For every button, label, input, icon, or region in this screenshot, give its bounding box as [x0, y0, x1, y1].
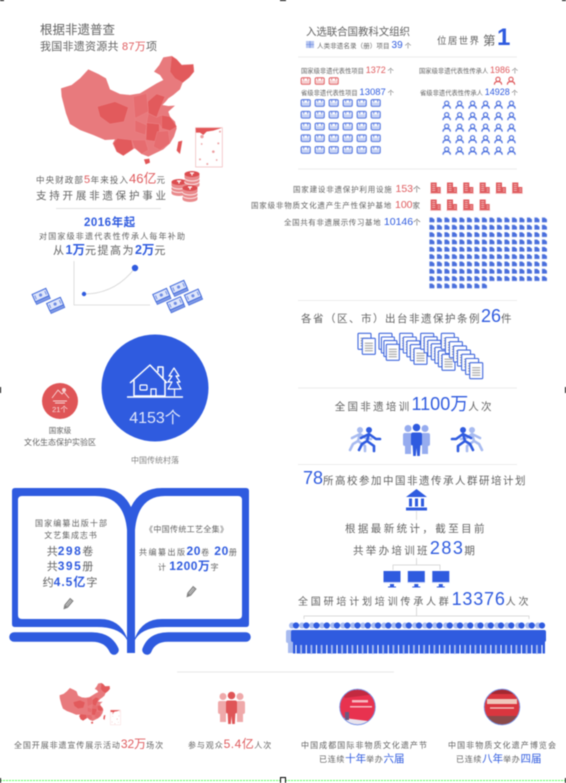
label: ecological protection zones: 文化生态保护实验区 — [24, 437, 96, 447]
text: central finance funding: 支持开展非遗保护事业 — [36, 189, 166, 202]
label: provincial inheritors: 省级非遗代表性传承人 14928 个 — [420, 87, 518, 97]
line chart: subsidy growth — [74, 261, 150, 305]
icon: institution — [406, 489, 427, 510]
label: ecological protection zones: 国家级 — [49, 425, 72, 435]
title: national survey — [40, 23, 157, 53]
rank first in the world: 位居世界 — [437, 35, 479, 47]
left page text: 共395册 — [47, 559, 93, 573]
UNESCO heading — [306, 25, 412, 51]
small map of China — [60, 683, 121, 725]
rank first in the world: 第 — [483, 34, 496, 48]
title: national survey: 我国非遗资源共 87万项 — [40, 39, 157, 53]
label: transmission bases: 全国共有非遗展示传习基地 10146个 — [284, 216, 421, 228]
label: national representative projects: 国家级非遗代表性项目 1372 个 — [301, 65, 394, 75]
right page text — [139, 524, 238, 573]
icon: money left — [32, 288, 65, 314]
label: national inheritors: 国家级非遗代表性传承人 1986 个 — [419, 65, 519, 75]
left page text: 约4.5亿字 — [43, 574, 97, 589]
icons: red buildings — [430, 182, 523, 210]
book panel — [12, 488, 249, 653]
text: Chengdu festival: 中国成都国际非物质文化遗产节 — [301, 740, 427, 750]
big circle: traditional villages — [102, 334, 208, 442]
icons: blue base grid — [429, 216, 549, 290]
icons: monitors — [384, 571, 449, 588]
heading: regulations: 各省（区、市）出台非遗保护条例26件 — [301, 306, 513, 326]
right page text: 共编纂出版20卷 20册 — [139, 544, 238, 558]
icons: document stacks — [358, 333, 483, 379]
left page text: 文艺集成志书 — [44, 530, 98, 540]
text: 320000 activities: 全国开展非遗宣传展示活动32万场次 — [14, 737, 164, 751]
heading: training: 全国非遗培训1100万人次 — [335, 394, 494, 414]
big circle: traditional villages: 4153个 — [129, 409, 181, 427]
heading: 78 universities: 78所高校参加中国非遗传承人群研培计划 — [303, 468, 527, 488]
text: 2016 subsidy — [39, 215, 185, 257]
UNESCO heading: 入选联合国教科文组织 — [306, 25, 410, 38]
right page text: 计 1200万字 — [158, 559, 219, 573]
text: 2016 subsidy: 从1万元提高为2万元 — [53, 243, 167, 257]
icon: right pencil — [185, 586, 197, 599]
small circle: ecological protection zones — [42, 383, 78, 419]
left page text — [35, 518, 107, 589]
text: central finance funding — [36, 171, 166, 202]
label: production bases: 国家级非物质文化遗产生产性保护基地 100家 — [251, 199, 421, 211]
small circle: ecological protection zones: 21个 — [52, 405, 68, 414]
text: 13376 trainees: 全国研培计划培训传承人群13376人次 — [298, 589, 531, 609]
text: audience: 参与观众5.4亿人次 — [188, 736, 272, 751]
photo: heritage expo — [484, 689, 521, 726]
text: Chengdu festival: 已连续十年举办六届 — [319, 752, 405, 765]
text: heritage expo: 已连续八年举办四届 — [456, 752, 542, 765]
text: 2016 subsidy: 2016年起 — [84, 215, 136, 229]
icons: red project icons — [301, 78, 338, 84]
photo: Chengdu festival — [339, 689, 376, 726]
text: latest statistics: 根据最新统计，截至目前 — [345, 522, 487, 535]
text: heritage expo — [448, 740, 556, 765]
UNESCO heading: 人类非遗名录（册）项目 39 个 — [317, 40, 412, 51]
title: national survey: 根据非遗普查 — [40, 23, 115, 37]
rank first in the world: 1 — [497, 24, 510, 51]
label: provincial projects: 省级非遗代表性项目 13087 个 — [301, 87, 395, 98]
icon: coins — [172, 171, 200, 202]
label: facilities: 国家建设非遗保护利用设施 153个 — [293, 183, 421, 195]
right page text: 《中国传统工艺全集》 — [145, 524, 228, 534]
label: traditional villages: 中国传统村落 — [131, 455, 179, 465]
icon: audience — [218, 692, 245, 724]
rank first in the world — [437, 24, 510, 51]
text: central finance funding: 中央财政部5年来投入46亿元 — [36, 171, 166, 186]
text: 283 sessions: 共举办培训班283期 — [353, 538, 477, 558]
text: 2016 subsidy: 对国家级非遗代表性传承人每年补助 — [39, 231, 185, 241]
icons: blue inheritor grid — [440, 99, 518, 157]
icons: blue project grid — [299, 97, 383, 156]
icons: red inheritor icons — [494, 77, 515, 85]
icon: money right — [153, 280, 203, 313]
text: heritage expo: 中国非物质文化遗产博览会 — [448, 740, 556, 750]
left page text: 国家编纂出版十部 — [35, 518, 107, 528]
label: ecological protection zones — [24, 425, 96, 447]
icon: crowd of inheritors — [286, 622, 546, 654]
icon: left pencil — [62, 598, 74, 611]
left page text: 共298卷 — [47, 544, 93, 558]
map of China — [61, 56, 222, 167]
text: Chengdu festival — [301, 740, 427, 765]
icons: training people — [350, 424, 482, 456]
